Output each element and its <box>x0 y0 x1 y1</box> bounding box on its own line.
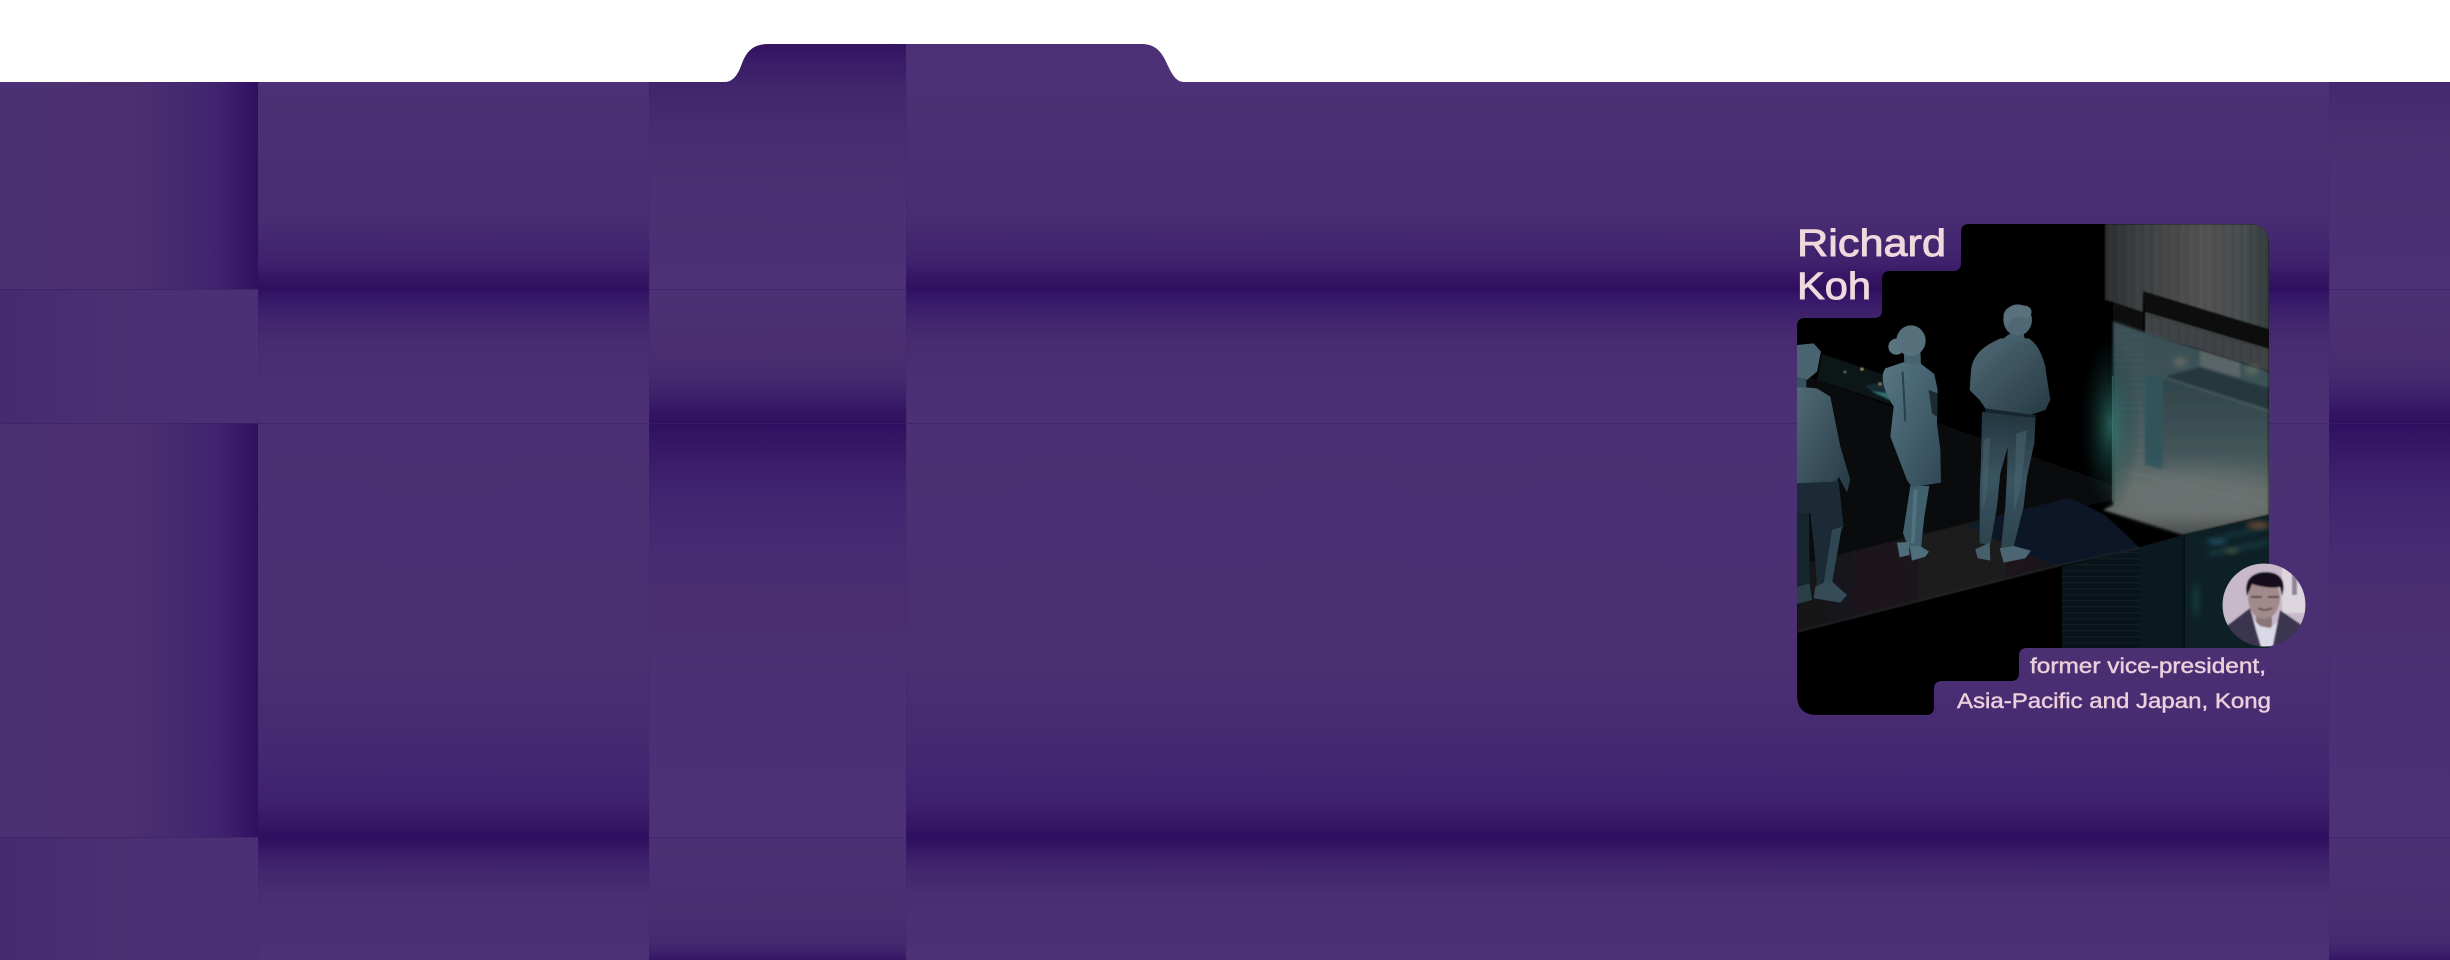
portrait of Richard Koh <box>2222 563 2306 650</box>
column 4 cells with light tab <box>906 44 2329 960</box>
data screen strip <box>1816 354 1892 404</box>
tower upper panel <box>2105 224 2269 371</box>
name heading: Koh <box>1797 266 1871 308</box>
back ledge <box>1797 372 2113 565</box>
column 5 cells <box>2329 82 2450 960</box>
figure: woman in centre <box>1883 325 1941 561</box>
job title caption: former vice-president, <box>2030 655 2266 678</box>
name heading: Richard <box>1797 223 1946 265</box>
glass server room <box>2103 321 2275 535</box>
figure: man on right <box>1970 304 2050 563</box>
column 2 cells <box>258 82 649 960</box>
job title caption: Asia-Pacific and Japan, Kong <box>1957 690 2271 713</box>
lower server racks <box>2062 515 2269 650</box>
figures <box>1797 304 2050 604</box>
name heading <box>1797 223 1946 308</box>
column 3 cells with dark tab <box>649 44 906 960</box>
job title caption <box>1957 655 2271 713</box>
platform deck <box>1797 498 2140 632</box>
teal glow <box>2086 353 2134 500</box>
column 1 cells <box>0 82 258 960</box>
figure: man on left <box>1797 343 1850 604</box>
photo: figures looking at data centre <box>1797 224 2275 715</box>
